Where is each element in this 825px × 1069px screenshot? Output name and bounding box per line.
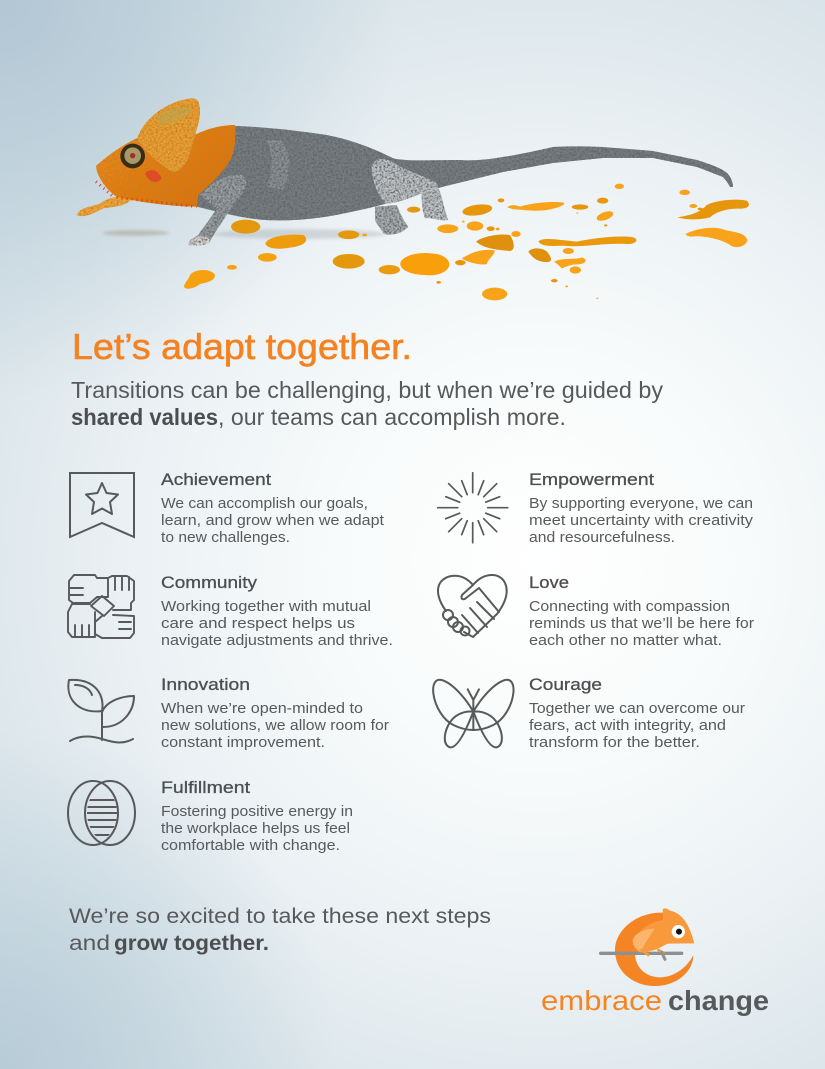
value: achievement: to new challenges. [161,529,290,546]
value: empowerment: Empowerment [529,470,654,489]
hero illustration: chameleon with paint splatter [77,98,749,300]
closing message [69,905,491,955]
icon: heart with handshake [438,575,507,637]
value: love: each other no matter what. [529,632,722,649]
value: achievement: Achievement [161,470,271,489]
logo mark [601,908,694,986]
paint splatter right [411,184,749,300]
value: achievement: learn, and grow when we adapt [161,512,385,529]
icon: butterfly [433,680,514,747]
logo wordmark: embrace [541,985,662,1016]
value: fulfillment: Fulfillment [161,778,250,797]
value: courage: fears, act with integrity, and [529,717,726,734]
closing message: and [69,932,110,955]
value: community: navigate adjustments and thrive. [161,632,393,649]
intro text [71,377,663,430]
paint splatter left [184,207,458,289]
value: innovation: Innovation [161,675,250,694]
value: innovation [68,675,389,751]
value: community: Community [161,573,258,592]
cast shadows [103,229,387,239]
value: achievement [70,470,385,546]
closing message: We’re so excited to take these next steps [69,905,491,928]
value: fulfillment: comfortable with change. [161,837,340,854]
value: innovation: When we’re open-minded to [161,700,363,717]
value: courage: Courage [529,675,602,694]
value: fulfillment: the workplace helps us feel [161,820,350,837]
value: innovation: constant improvement. [161,734,325,751]
intro text: , our teams can accomplish more. [218,404,566,430]
value: love [438,573,754,649]
value: empowerment: meet uncertainty with creativity [529,512,754,529]
value: community [68,573,393,649]
value: courage: transform for the better. [529,734,700,751]
intro text: shared values [71,404,218,430]
value: love: reminds us that we’ll be here for [529,615,754,632]
logo: embrace change [541,908,769,1016]
value: love: Connecting with compassion [529,598,730,615]
value: achievement: We can accomplish our goals, [161,495,368,512]
intro text: Transitions can be challenging, but when we’re guided by [71,377,663,403]
icon: overlapping circles [68,781,135,845]
logo wordmark [541,985,769,1016]
icon: radiating burst [438,473,508,543]
value: courage [433,675,745,751]
value: innovation: new solutions, we allow room for [161,717,389,734]
value: community: Working together with mutual [161,598,371,615]
value: empowerment [438,470,754,546]
value: love: Love [529,573,569,592]
icon: sprout [68,680,134,742]
icon: four joined hands [68,575,134,638]
value: courage: Together we can overcome our [529,700,745,717]
chameleon body in grey [188,126,733,246]
title: Let’s adapt together. [72,326,412,367]
value: community: care and respect helps us [161,615,355,632]
logo wordmark: change [668,985,769,1016]
closing message: grow together. [114,932,269,955]
value: empowerment: and resourcefulness. [529,529,675,546]
value: empowerment: By supporting everyone, we can [529,495,753,512]
value: fulfillment [68,778,353,854]
icon: ribbon with star [70,473,134,537]
value: fulfillment: Fostering positive energy in [161,803,353,820]
chameleon head in orange [77,98,235,216]
